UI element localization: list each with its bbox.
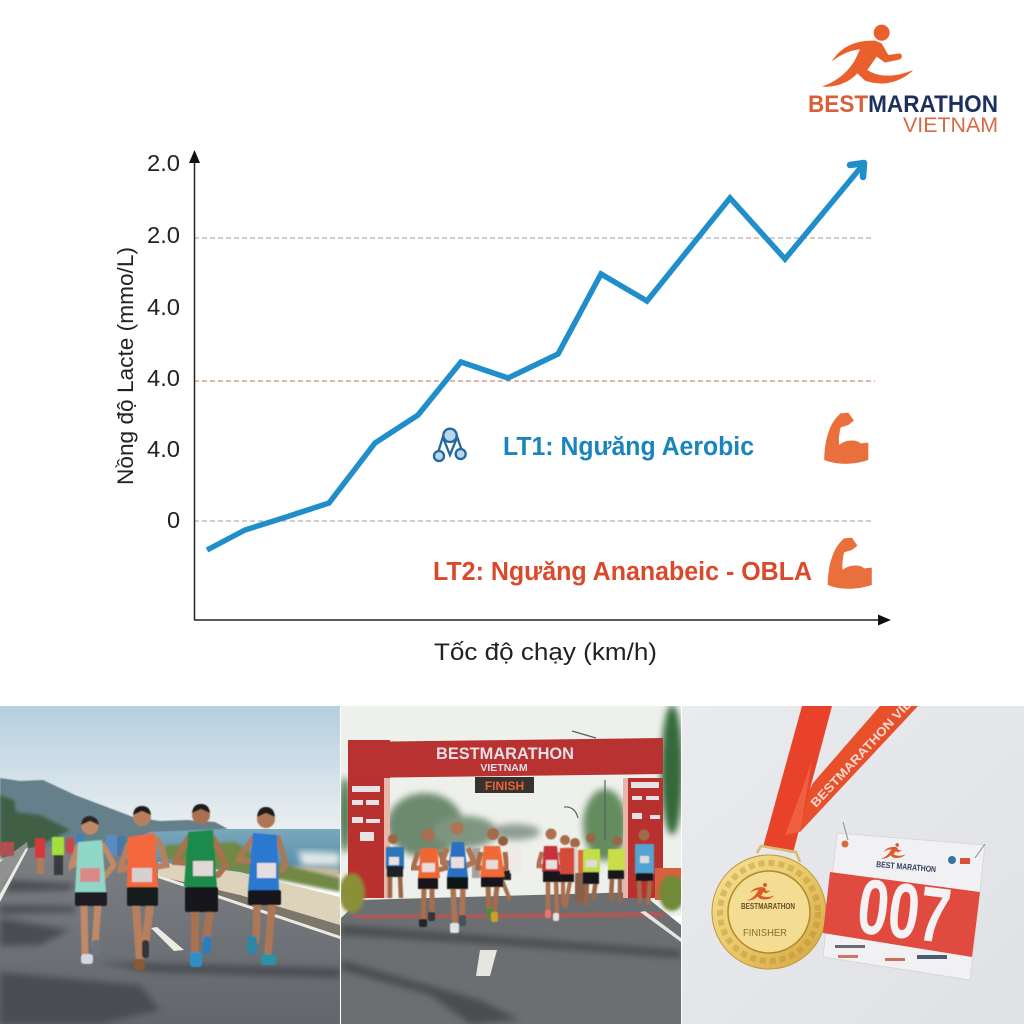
road [0,845,340,1024]
threshold grid lines [194,238,875,521]
road shoulder [158,875,340,936]
lane dash [476,950,497,976]
y axis tick labels [147,150,180,533]
y axis [189,150,200,620]
flowers right [655,868,685,911]
runner: blue 2 [442,822,474,933]
icon: muscle LT1 [824,413,868,464]
photo: runners on coastal road [0,706,340,1024]
bib logo icon [881,843,906,859]
background runners [472,836,592,903]
sky [0,706,340,829]
x axis [194,614,891,626]
trees on left [0,795,70,860]
lactate curve [207,163,864,550]
road shadows [341,925,681,1024]
medal [712,855,826,969]
medal brand: BESTMARATHON [741,901,795,911]
medal finisher: FINISHER [743,927,787,939]
y axis tick labels: 4.0 [147,436,180,462]
runner 3: green tank [175,804,226,967]
runner 4: blue tank [238,807,286,965]
front ribbon [763,706,832,853]
flowers left [339,873,365,913]
ribbon text: BESTMARATHON VIET [808,691,921,810]
label: LT1: LT1: Ngưăng Aerobic [503,433,754,461]
sponsor patches [352,782,660,841]
runner: yellow [608,836,625,902]
arch subtitle: VIETNAM [480,762,528,774]
road shadows [0,880,340,1024]
y axis tick labels: 4.0 [147,294,180,320]
runner 1: mint tank [71,816,114,964]
y axis tick labels: 2.0 [147,150,180,176]
road [341,892,681,1024]
bib sponsors [835,840,970,961]
icon: orange runner [822,25,913,87]
photo: finisher medal and race bib [682,691,1024,1024]
race bib [823,822,985,980]
runner: light blue [635,830,654,905]
safety pins [843,822,985,858]
distant crowd [0,834,126,875]
runner: orange 3 [477,828,507,922]
back ribbon with text [792,691,921,832]
trees [339,705,683,861]
lamp post [564,731,605,840]
runner: orange 1 [413,828,446,927]
y axis tick labels: 4.0 [147,365,180,391]
road markings [0,848,340,951]
medal loop [757,846,800,862]
runner: crimson [560,835,574,908]
y axis tick labels: 2.0 [147,222,180,248]
runner: red [538,828,563,921]
logo subtitle: VIETNAM [903,114,998,137]
background [682,706,1024,1024]
finish arch [348,738,663,898]
mountains [0,778,228,852]
runner: lime [583,833,600,906]
finish board [475,777,534,793]
guard wall on left [0,842,28,896]
logo wordmark: BESTMARATHON [808,91,998,118]
label: LT2: LT2: Ngưăng Ananabeic - OBLA [433,558,812,586]
finish text: FINISH [485,779,524,793]
logo: BestMarathon Vietnam [808,25,998,137]
runner 2: orange tank [120,806,167,970]
bib number: 007 [853,863,955,960]
medal runner icon [747,883,774,900]
icon: muscle LT2 [828,538,872,589]
x axis title: Tốc độ chạy (km/h) [434,639,657,666]
y axis tick labels: 0 [167,507,180,533]
arch title: BESTMARATHON [436,744,574,763]
chart: lactate vs running speed [113,150,891,666]
icon: network nodes [434,429,466,461]
y axis title: Nồng độ Lacte (mmo/L) [113,247,138,485]
sky [341,706,681,916]
concrete wall [158,862,340,925]
runner: blue, left [386,834,404,898]
bib brand: BEST MARATHON [876,859,936,874]
photo: finish line arch [339,705,685,1024]
sea [140,829,340,874]
sand and shrubs [165,842,340,892]
